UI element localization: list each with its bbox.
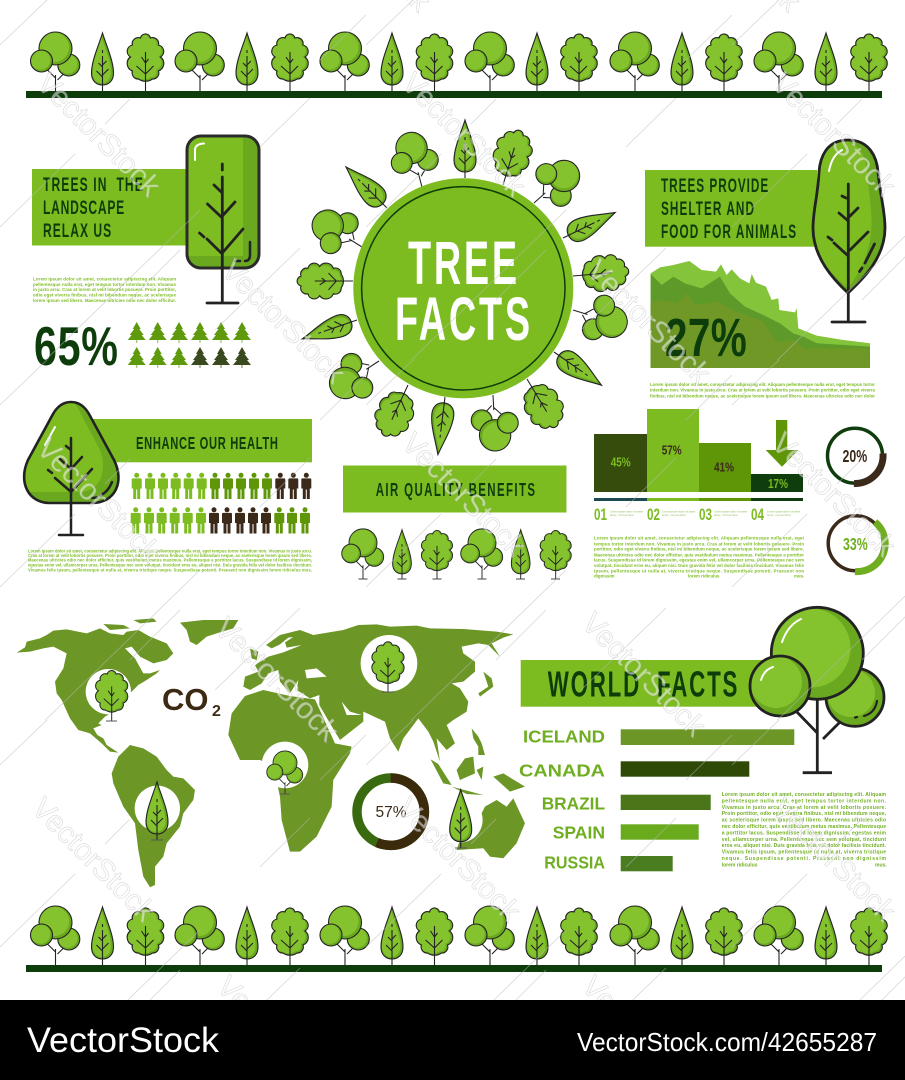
bar: Canada: CANADA [519,761,605,781]
watermarks: VectorStock [215,254,352,391]
text block: bar chart: lacus. Suspendisse id lorem dignissim, egestas enim vel, ullamcorper urna. Pellentesque nec sem [594,558,804,563]
heading: trees in the landscape: LANDSCAPE [43,197,124,219]
text block: health: Cras at lorem at velit lobortis posuere. Proin porttitor, odio eget viverra finibus, nisl mi bibendum neque, ac scelerisque lorem ipsum sed libero. [28,553,312,558]
heading: trees in the landscape: TREES IN THE [43,174,143,196]
text block: world facts: mus. [875,862,887,868]
text block: world facts: Lorem ipsum dolor sit amet, consectetur adipiscing elit. Aliquam [722,792,887,798]
banner: shelter [645,170,817,247]
donut: 57%: 57% [375,804,407,821]
icon: large round tree [750,607,884,773]
bar: 45% [594,434,647,492]
category labels: Lorem ipsum dolor sit amet [610,510,643,513]
text block: bar chart: tempus tortor interdum non. Vivamus in justo arcu. Cras at lorem at velit lobortis posuere. Proin [594,541,804,546]
text block: world facts: neque. Suspendisse potenti. Praesent non dignissim [722,856,887,862]
text block: world facts [722,792,887,868]
watermarks: VectorStock [390,792,527,929]
bar: 17%: 17% [768,476,788,491]
text block: bar chart: mus. [794,574,804,579]
text block: landscape: in justo arcu. Cras at lorem at velit lobortis posuere. Proin porttitor, [33,287,176,292]
category labels: Lorem ipsum dolor sit amet [662,510,695,513]
category labels [594,505,800,524]
text block: world facts: a porttitor lacus. Suspendisse id lorem dignissim, egestas enim [722,830,887,836]
text block: health [28,548,312,573]
title badge: TREE [408,229,517,297]
heading: shelter and food: FOOD FOR ANIMALS [661,222,796,243]
bar: Canada [519,761,749,781]
text block: landscape: pellentesque nulla erat, eget tempus tortor interdum non. Vivamus [33,282,177,287]
text block: health: Lorem ipsum dolor sit amet, consectetur adipiscing elit. Aliquam pellentesque nulla erat, eget tempus tortor interdum non. Vivamus in justo arcu. [28,548,312,553]
panel: landscape relax [32,136,259,377]
footer band: VectorStock.com/42655287 [577,1027,877,1057]
category labels: 03 [699,505,712,524]
icon: rectangular tree [187,136,259,303]
heading: shelter and food: SHELTER AND [661,199,754,220]
heading: enhance our health: ENHANCE OUR HEALTH [136,433,278,454]
bar: Brazil [542,793,711,813]
watermarks: VectorStock [580,254,717,391]
category labels: amet, consectetur [610,514,634,517]
pictogram: pine trees [128,322,251,368]
watermarks: VectorStock [25,792,162,929]
text block: shelter: finibus, nisl mi bibendum neque, ac scelerisque lorem ipsum sed libero. Maecenas ultricies odio nec dolor [650,393,875,398]
heading: trees in the landscape [43,174,143,242]
text block: health: egestas enim vel, ullamcorper urna. Pellentesque nec sem volutpat, tincidunt eros eu, aliquet nisi. Duis gravida felis vel dolor facilisis tincidunt. [28,562,312,567]
bar: 17% [751,474,803,492]
bar: Iceland [523,727,794,747]
bar: Russia: RUSSIA [544,852,605,872]
pictogram: people row two [131,507,310,534]
text block: world facts: Vivamus felis ipsum, pellentesque ut nulla at, viverra tristique [722,850,886,856]
text block: bar chart: Lorem ipsum dolor sit amet, consectetur adipiscing elit. Aliquam pellentesque nulla erat, eget [594,536,805,541]
panel: tree facts centre [297,120,634,456]
watermarks: VectorStock [208,612,345,749]
text block: health: Vivamus felis ipsum, pellentesque ut nulla at, viverra tristique neque. Suspendisse potenti. Praesent non dignissim lorem ridiculus mus. [28,568,312,573]
bar: 41% [699,443,751,492]
donut: 57% [357,778,424,845]
panel: shelter and food [645,140,885,398]
arrow: down [766,420,798,467]
footer band [0,1000,905,1080]
panel: enhance our health [23,402,312,573]
banner: trees in the landscape [32,169,190,246]
donut: 33%: 33% [843,534,868,554]
stat: 27%: 27% [665,308,747,368]
watermarks: VectorStock [30,432,167,569]
heading: shelter and food: TREES PROVIDE [661,176,768,197]
text block: landscape: lorem ipsum sed libero. Maecenas ultricies odio nec dolor efficitur. [33,298,176,303]
category labels: 04 [751,505,764,524]
text block: landscape: odio eget viverra finibus, nisl mi bibendum neque, ac scelerisque [33,292,177,298]
panel: world facts [519,607,887,872]
text block: bar chart [594,536,805,579]
category labels: 02 [647,505,660,524]
donut: 33% [828,516,885,572]
text block: bar chart: volutpat, tincidunt eros eu, aliquet nisi. Duis gravida felis vel dolor facilisis tincidunt. Vivamus felis [594,563,805,568]
donut: 20% [828,428,883,484]
bar: 45%: 45% [611,454,631,470]
text block: shelter: interdum non. Vivamus in justo arcu. Cras at lorem at velit lobortis posuere. Proin porttitor, odio eget viverra [650,388,876,393]
bar: Spain: SPAIN [553,822,605,842]
category labels: amet, consectetur [662,514,686,517]
text block: shelter: Lorem ipsum dolor sit amet, consectetur adipiscing elit. Aliquam pellentesque nulla erat, eget tempus tortor [650,382,875,387]
watermarks: VectorStock [395,427,532,564]
text block: bar chart: dignissim [594,574,615,579]
text block: world facts: pellentesque nulla erat, eget tempus tortor interdum non. [722,798,887,804]
text block: world facts: vel, ullamcorper urna. Pellentesque nec sem volutpat, tincidunt [722,837,886,843]
icon: oval tree [813,140,885,322]
panel: bar chart [594,409,805,579]
watermarks: VectorStock [765,792,902,929]
footer band: VectorStock [27,1021,220,1060]
text block: bar chart: ipsum, pellentesque ut nulla at, viverra tristique neque. Suspendisse potenti. Praesent non [594,568,804,573]
label: CO2: 2 [212,703,221,720]
heading: shelter and food [661,176,796,243]
category labels: Lorem ipsum dolor sit amet [767,510,800,513]
bar: 41%: 41% [714,460,734,474]
icon: triangular tree [23,402,118,535]
text block: landscape: Lorem ipsum dolor sit amet, consectetur adipiscing elit. Aliquam [33,277,176,282]
text block: shelter [650,382,876,398]
text block: world facts: Proin porttitor, odio eget viverra finibus, nisl mi bibendum neque, [722,811,887,817]
category labels: 01 [594,505,607,524]
text block: world facts: lorem ridiculus [722,862,758,868]
text block: world facts: ac scelerisque lorem ipsum sed libero. Maecenas ultricies odio [722,818,886,824]
heading: world facts: WORLD FACTS [548,665,737,705]
category labels: amet, consectetur [767,514,791,517]
title badge: FACTS [395,285,530,353]
watermarks: VectorStock [30,67,167,204]
category labels: Lorem ipsum dolor sit amet [714,510,747,513]
bar: Brazil: BRAZIL [542,793,605,813]
pictogram: people row one [132,473,311,499]
heading: air quality: AIR QUALITY BENEFITS [376,480,535,501]
text block: world facts: eros eu, aliquet nisi. Duis gravida felis vel dolor facilisis tincidunt. [722,843,887,849]
tree row: air quality [342,529,571,579]
label: CO2: CO [162,682,208,717]
text block: world facts: Vivamus in justo arcu. Cras at lorem at velit lobortis posuere. [722,805,887,811]
text block: landscape [33,277,177,303]
watermarks: VectorStock [395,67,532,204]
text block: bar chart: Maecenas ultricies odio nec dolor efficitur, quis vestibulum metus maximus. Pellentesque a porttitor [594,552,804,557]
bar: Iceland: ICELAND [523,727,605,747]
text block: health: Maecenas ultricies odio nec dolor efficitur, quis vestibulum metus maximus. Pellentesque a porttitor lacus. Suspendisse id lorem dignissim, [28,558,312,563]
panel: air quality benefits [342,466,571,579]
bar: Spain [553,822,699,842]
bar: 57%: 57% [662,442,682,458]
world map [17,618,525,887]
text block: world facts: nec dolor efficitur, quis vestibulum metus maximus. Pellentesque [722,824,886,830]
text block: bar chart: lorem ridiculus [688,574,720,579]
top tree row [26,32,887,98]
bar: Russia [544,852,673,872]
map tree markers [95,642,472,848]
bottom tree row [26,906,887,972]
donut: 20%: 20% [842,446,867,466]
watermarks: VectorStock [765,427,902,564]
title badge [353,178,573,398]
heading: trees in the landscape: RELAX US [43,220,111,242]
axis strip [594,498,803,501]
watermarks: VectorStock [575,607,712,744]
banner: world facts [521,660,767,707]
banner: air quality [343,466,566,512]
bar: 57% [647,409,699,492]
category labels: amet, consectetur [714,514,738,517]
watermarks: VectorStock [765,67,902,204]
stat: 65%: 65% [34,316,118,377]
text block: bar chart: porttitor, odio eget viverra finibus, nisl mi bibendum neque, ac scelerisque lorem ipsum sed libero. [594,547,804,552]
banner: health [93,419,312,462]
area chart [651,261,870,368]
ring of trees [297,120,634,456]
